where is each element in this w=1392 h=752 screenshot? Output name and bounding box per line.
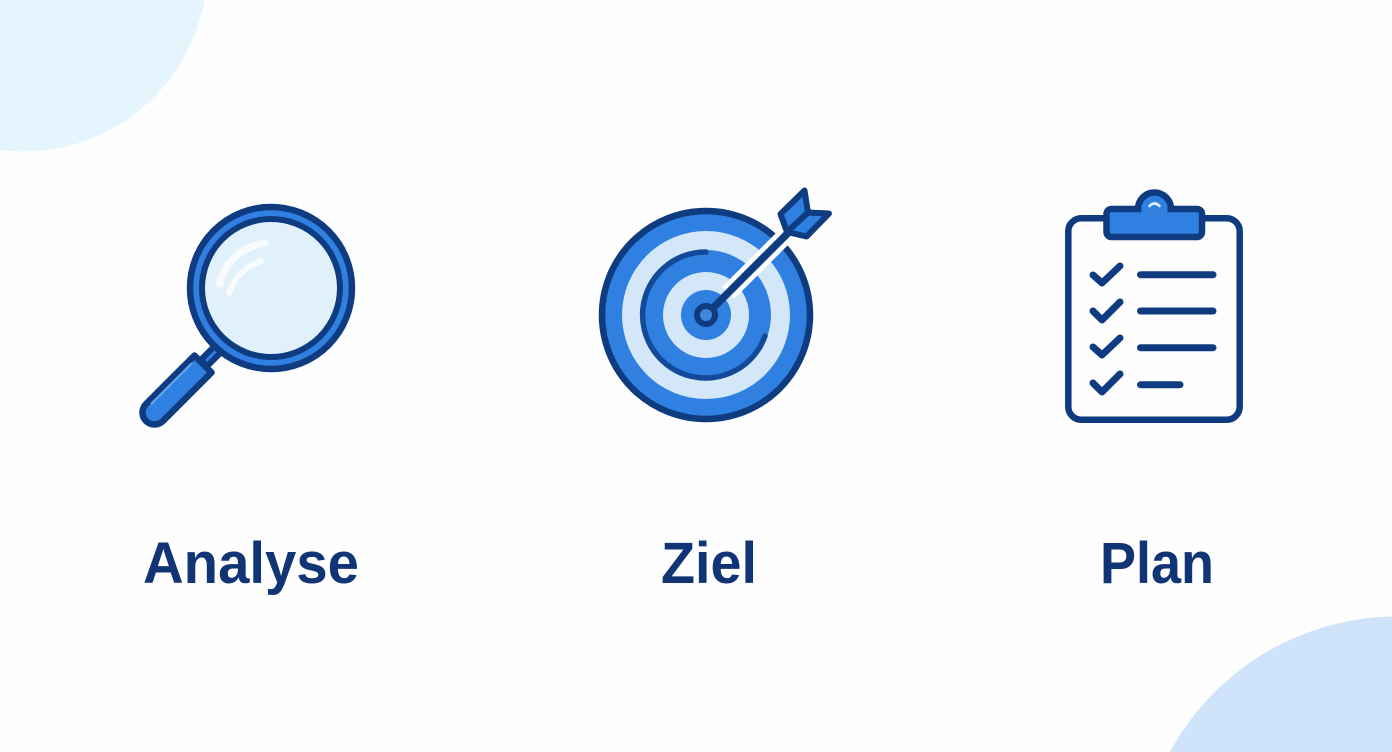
- target light ring: [622, 231, 790, 399]
- panel: Plan: [1068, 192, 1240, 596]
- checklist row 1: [1093, 266, 1213, 283]
- handle highlight: [151, 363, 192, 404]
- inner ring accent arc: [643, 252, 765, 378]
- label: Ziel: Ziel: [661, 531, 757, 596]
- panel: Analyse: [142, 207, 359, 596]
- decorative corner shape top left: [0, 0, 204, 151]
- checklist row 4: [1093, 374, 1180, 392]
- target inner light ring: [663, 272, 749, 358]
- magnifier neck: [203, 341, 226, 364]
- arrow fletching: [780, 190, 829, 236]
- label: Plan: Plan: [1100, 531, 1214, 596]
- arrow tip hub: [697, 306, 715, 324]
- checklist row 3: [1093, 338, 1213, 355]
- lens highlights: [220, 243, 265, 284]
- target outer ring: [602, 211, 810, 419]
- icon: magnifying glass: [142, 207, 352, 425]
- label: Analyse: Analyse: [143, 531, 359, 596]
- magnifier handle: [142, 356, 212, 425]
- icon: clipboard checklist: [1068, 192, 1240, 420]
- panel: Ziel: [602, 190, 829, 596]
- magnifier ring and lens: [190, 207, 352, 369]
- bullseye: [681, 290, 731, 340]
- clipboard board: [1068, 218, 1240, 420]
- checklist row 2: [1093, 302, 1213, 320]
- arrow shaft: [706, 225, 796, 315]
- arrow shaft white gap: [728, 226, 795, 293]
- clipboard clip: [1106, 192, 1202, 237]
- target blue ring: [641, 250, 771, 380]
- decorative corner shape bottom right: [1170, 616, 1392, 752]
- icon: target with arrow: [602, 190, 829, 419]
